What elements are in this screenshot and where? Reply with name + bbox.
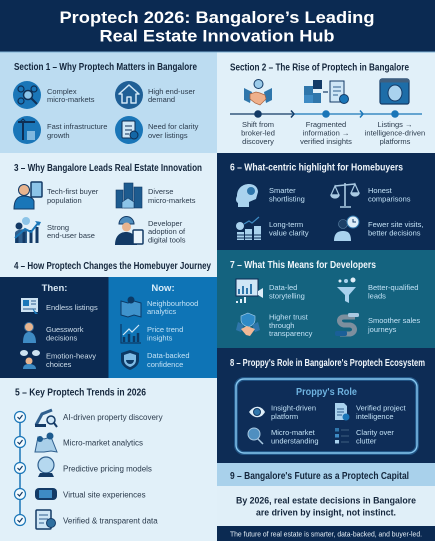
- text: fragmented information: [300, 120, 352, 146]
- text: need for clarity: [148, 122, 199, 140]
- text: emotion-heavy choices: [46, 352, 96, 369]
- text: guesswork decisions: Guesswork: [46, 325, 84, 334]
- card: proppy's role: [236, 379, 417, 453]
- text: neighbourhood analytics: [147, 299, 198, 316]
- text: high end-user demand: High end-user: [148, 87, 196, 96]
- text: micro-market understanding: [271, 428, 319, 446]
- icon: brain gears: [236, 184, 258, 207]
- icon: neighbourhood analytics: [121, 296, 141, 317]
- text: diverse micro-markets: Diverse: [148, 187, 173, 196]
- icon: guesswork decisions: [23, 322, 36, 343]
- text: fast infrastructure growth: Fast infrastructure: [47, 122, 107, 131]
- text: strong end-user base: [47, 223, 95, 240]
- icon: micro-market analytics: [35, 432, 57, 452]
- icon: fast infrastructure growth: [13, 116, 41, 144]
- text: data-led storytelling: storytelling: [269, 292, 305, 300]
- icon: eye: [249, 407, 265, 417]
- statement: [236, 496, 416, 518]
- text: micro-market analytics: Micro-market analytics: [63, 438, 143, 448]
- panel: section 5 key trends: [0, 378, 217, 541]
- text: long-term value: value clarity: [269, 228, 309, 238]
- text: tech-first buyer: Tech-first buyer: [47, 187, 99, 196]
- title banner: [0, 0, 435, 52]
- icon: high end-user demand: [115, 81, 143, 109]
- panel: now column: [108, 277, 217, 378]
- timeline with check marks: [14, 412, 26, 526]
- timeline arrow: [230, 110, 422, 118]
- text: insight-driven: [271, 404, 316, 421]
- text: fewer site visits: Fewer site visits,: [368, 220, 423, 229]
- text: micro-market understanding: understanding: [271, 436, 319, 446]
- text: emotion-heavy choices: choices: [46, 360, 72, 369]
- text: tech-first buyer: population: [47, 196, 82, 205]
- text: emotion-heavy choices: Emotion-heavy: [46, 352, 96, 360]
- heading: section 1: Section 1 – Why Proptech Matters in Bangalore: [14, 62, 197, 73]
- text: price trend insights: [147, 325, 183, 342]
- icon: funnel: [337, 278, 356, 303]
- icon: complex micro-markets: [13, 81, 41, 109]
- icon: endless listings: [21, 298, 38, 314]
- panel: section 1 why proptech matters: [0, 52, 217, 153]
- panel: section 8 proppy's role: [217, 348, 435, 463]
- heading: section 7: 7 – What This Means for Developers: [230, 260, 376, 271]
- text: shift from broker-led: Shift from: [242, 120, 274, 129]
- text: higher trust: through: [269, 321, 294, 330]
- text: virtual site: Virtual site experiences: [63, 490, 146, 500]
- text: fewer site visits: [368, 220, 423, 238]
- heading: section 3: 3 – Why Bangalore Leads Real Estate Innovation: [14, 163, 202, 174]
- text: insight-driven: platform: [271, 412, 298, 421]
- text: clarity over clutter: clutter: [356, 436, 377, 446]
- panel: section 6 homebuyers: [217, 153, 435, 250]
- text: higher trust: Higher trust: [269, 312, 309, 322]
- icon: list: [335, 428, 349, 444]
- icon: document: [335, 403, 350, 420]
- text: smoother sales: [367, 316, 420, 334]
- text: data-backed confidence: Data-backed: [147, 351, 190, 360]
- text: data-led storytelling: [269, 283, 305, 300]
- panel: then column: [0, 277, 108, 378]
- text: insight-driven: Insight-driven: [271, 404, 316, 412]
- text: shift from broker-led: [241, 120, 275, 146]
- text: smoother sales: journeys: [367, 325, 397, 334]
- text: smarter shortlisting: shortlisting: [269, 194, 305, 204]
- text: verified project: intelligence: [356, 412, 394, 421]
- text: fast infrastructure growth: growth: [47, 131, 70, 140]
- text: verified project: [356, 404, 407, 421]
- text: high end-user demand: [148, 87, 196, 104]
- panel: section 7 developers: [217, 250, 435, 348]
- icon: coins value: [236, 217, 261, 240]
- text: micro-market understanding: Micro-market: [271, 428, 316, 437]
- text: honest comparisons: comparisons: [368, 194, 411, 204]
- text: data-led storytelling: Data-led: [269, 283, 297, 292]
- icon: data storytelling: [236, 279, 263, 303]
- text: data-backed confidence: confidence: [147, 360, 183, 369]
- icon: ai-driven discovery: [35, 410, 57, 427]
- icon: scales: [331, 183, 359, 207]
- text: developer digital tools: Developer: [148, 219, 183, 228]
- icon: strong end-user base: [15, 217, 41, 243]
- text: shift from broker-led: discovery: [242, 137, 274, 146]
- text: endless listings: Endless listings: [46, 303, 98, 312]
- text: long-term value: Long-term: [269, 220, 303, 229]
- heading: then: Then:: [42, 283, 67, 294]
- icon: need for clarity: [115, 116, 143, 144]
- text: guesswork decisions: [46, 325, 84, 342]
- text: developer digital tools: [148, 219, 186, 244]
- icon: globe magnifier: [248, 428, 263, 444]
- text: developer digital tools: digital tools: [148, 236, 186, 244]
- icon: tech-first buyer: [14, 182, 42, 209]
- text: honest comparisons: Honest: [368, 186, 393, 195]
- heading: section 4: 4 – How Proptech Changes the Homebuyer Journey: [14, 261, 211, 272]
- text: fragmented information: verified insights: [300, 137, 352, 146]
- text: higher trust: [269, 312, 313, 338]
- icon: puzzle to document: [304, 80, 348, 104]
- text: better-qualified leads: leads: [368, 292, 386, 300]
- text: complex micro-markets: Complex: [47, 87, 77, 96]
- text: smarter shortlisting: Smarter: [269, 186, 296, 195]
- icon: virtual site: [35, 488, 57, 500]
- title banner: Proptech 2026: Bangalore’s Leading: [60, 8, 374, 27]
- icon: clock person: [334, 216, 359, 241]
- text: diverse micro-markets: [148, 187, 196, 205]
- text: smarter shortlisting: [269, 186, 305, 204]
- text: smoother sales: Smoother sales: [368, 316, 420, 325]
- icon: emotion-heavy choices: [20, 350, 40, 369]
- text: developer digital tools: adoption of: [148, 227, 186, 236]
- text: neighbourhood analytics: Neighbourhood: [147, 299, 198, 308]
- icon: price trend insights: [121, 324, 141, 343]
- text: ai-driven discovery: AI-driven property discovery: [63, 413, 163, 422]
- text: price trend insights: Price trend: [147, 325, 183, 334]
- text: clarity over clutter: Clarity over: [356, 428, 394, 437]
- statement: By 2026, real estate decisions in Bangalore: [236, 496, 416, 506]
- text: clarity over clutter: [356, 428, 394, 446]
- text: listings intelligence: [365, 120, 425, 146]
- heading: now: Now:: [151, 283, 175, 294]
- text: fragmented information: information →: [303, 128, 349, 138]
- text: strong end-user base: end-user base: [47, 231, 95, 240]
- icon: data-backed confidence: [121, 350, 139, 370]
- text: complex micro-markets: [47, 87, 95, 104]
- statement: are driven by insight, not instinct.: [256, 508, 396, 518]
- text: predictive pricing: Predictive pricing models: [63, 464, 152, 474]
- text: shift from broker-led: broker-led: [241, 128, 275, 138]
- text: honest comparisons: [368, 186, 411, 204]
- icon: diverse micro-markets: [116, 183, 142, 208]
- text: listings intelligence: Listings →: [377, 120, 413, 129]
- panel: section 9 future: [217, 463, 435, 541]
- text: listings intelligence: platforms: [380, 137, 411, 146]
- text: diverse micro-markets: micro-markets: [148, 196, 196, 205]
- text: high end-user demand: demand: [148, 95, 175, 104]
- text: tech-first buyer: [47, 187, 99, 205]
- text: listings intelligence: intelligence-driven: [365, 128, 425, 138]
- text: fragmented information: Fragmented: [306, 120, 346, 129]
- icon: verified data: [36, 510, 56, 529]
- icon: developer digital tools: [115, 217, 143, 245]
- text: fewer site visits: better decisions: [368, 228, 421, 238]
- text: need for clarity: Need for clarity: [148, 122, 199, 131]
- panel: section 3 why bangalore leads: [0, 153, 217, 277]
- text: complex micro-markets: micro-markets: [47, 95, 95, 104]
- panel: section 2 rise of proptech: [217, 52, 435, 153]
- text: better-qualified leads: [368, 283, 418, 300]
- icon: handshake: [244, 80, 272, 105]
- heading: section 6: 6 – What-centric highlight for Homebuyers: [230, 162, 403, 174]
- card title: Proppy's Role: [296, 387, 357, 398]
- icon: predictive pricing: [38, 457, 54, 477]
- text: fast infrastructure growth: [47, 122, 107, 140]
- text: guesswork decisions: decisions: [46, 334, 78, 342]
- text: better-qualified leads: Better-qualified: [368, 283, 418, 292]
- text: long-term value: [269, 220, 309, 238]
- text: price trend insights: insights: [147, 334, 173, 342]
- icon: brain platform: [380, 79, 409, 104]
- footer strip: [217, 526, 435, 541]
- text: strong end-user base: Strong: [47, 223, 69, 232]
- text: neighbourhood analytics: analytics: [147, 307, 176, 316]
- text: higher trust: transparency: [269, 329, 313, 338]
- icon: trust handshake: [236, 313, 260, 336]
- text: verified project: Verified project: [356, 404, 407, 412]
- heading: section 5: 5 – Key Proptech Trends in 2026: [15, 388, 146, 398]
- text: verified data: Verified & transparent data: [63, 516, 158, 526]
- icon: winding road: [335, 313, 359, 336]
- text: data-backed confidence: [147, 351, 190, 369]
- title banner: Real Estate Innovation Hub: [100, 26, 334, 46]
- text: need for clarity: over listings: [148, 131, 188, 140]
